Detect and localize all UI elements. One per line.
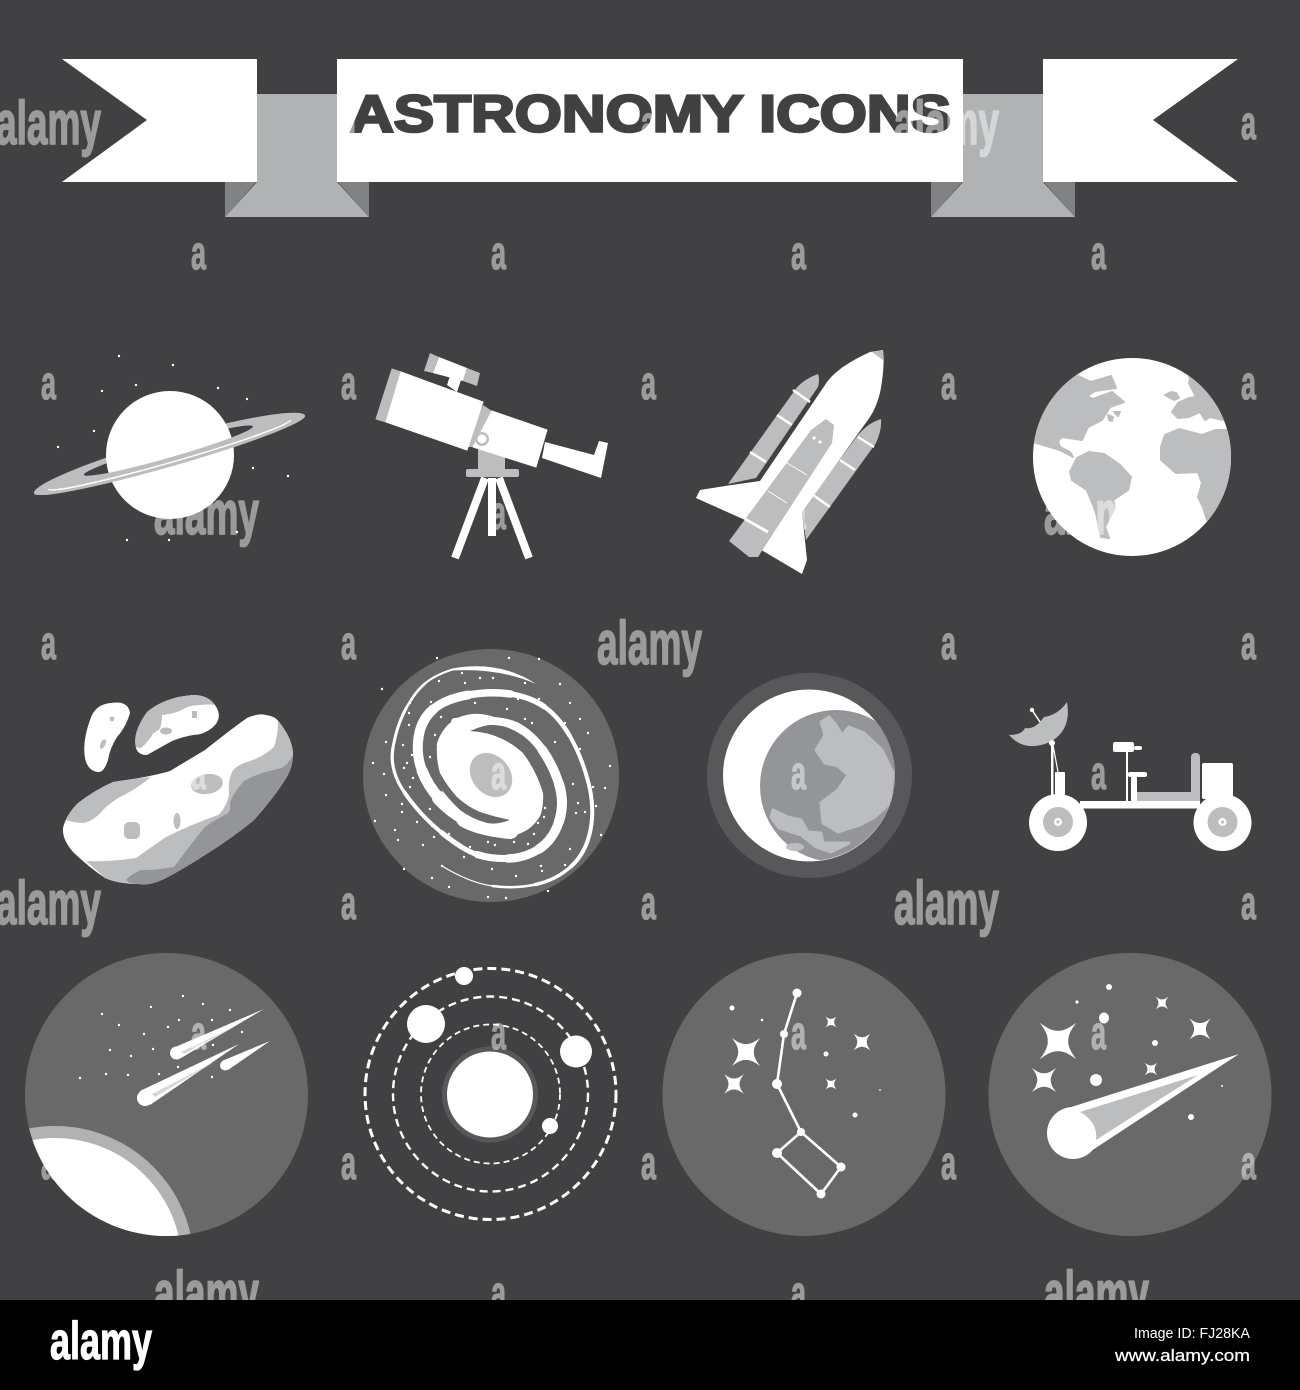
title ribbon: [62, 59, 1238, 217]
watermark pattern: alamy: [0, 869, 101, 937]
icon: solar system: [365, 967, 616, 1220]
icon: telescope: [376, 353, 608, 558]
icon: crescent moon: [707, 673, 912, 878]
watermark pattern: a: [641, 356, 656, 409]
watermark pattern: a: [341, 356, 356, 409]
watermark pattern: a: [1241, 1136, 1256, 1189]
watermark pattern: a: [41, 1136, 56, 1189]
watermark pattern: alamy: [154, 1259, 259, 1327]
watermark pattern: a: [791, 486, 806, 539]
watermark pattern: a: [491, 226, 506, 279]
watermark pattern: a: [191, 1006, 206, 1059]
watermark pattern: a: [791, 1266, 806, 1319]
watermark pattern: alamy: [0, 89, 101, 157]
website: www.alamy.com: [1114, 1346, 1250, 1365]
watermark pattern: a: [491, 746, 506, 799]
watermark pattern: a: [491, 1006, 506, 1059]
watermark pattern: a: [641, 1136, 656, 1189]
icon: big dipper constellation: [662, 953, 946, 1236]
watermark pattern: a: [491, 486, 506, 539]
icon: comet: [988, 953, 1272, 1236]
watermark pattern: a: [191, 746, 206, 799]
icon: saturn: [30, 355, 308, 541]
spiral arm one: [418, 693, 592, 887]
spiral arm two: [392, 670, 562, 859]
watermark pattern: a: [791, 1006, 806, 1059]
watermark pattern: alamy: [1044, 1259, 1149, 1327]
watermark pattern: a: [641, 96, 656, 149]
icon: earth globe: [1020, 358, 1240, 556]
watermark pattern: alamy: [894, 869, 999, 937]
image id: Image ID: FJ28KA: [1134, 1325, 1250, 1342]
watermark pattern: a: [1241, 876, 1256, 929]
footer logo: alamy: [50, 1312, 152, 1371]
icon: lunar rover: [1009, 702, 1252, 851]
watermark pattern: a: [941, 1136, 956, 1189]
watermark pattern: a: [1241, 356, 1256, 409]
watermark pattern: a: [941, 616, 956, 669]
icon: spiral galaxy: [363, 649, 619, 902]
watermark pattern: a: [1091, 746, 1106, 799]
watermark pattern: a: [1091, 226, 1106, 279]
watermark pattern: a: [1241, 616, 1256, 669]
watermark pattern: alamy: [154, 479, 259, 547]
watermark pattern: a: [791, 746, 806, 799]
watermark pattern: alamy: [1044, 479, 1149, 547]
watermark pattern: a: [341, 616, 356, 669]
watermark pattern: a: [341, 1136, 356, 1189]
watermark pattern: a: [1241, 96, 1256, 149]
watermark pattern: a: [641, 876, 656, 929]
watermark pattern: alamy: [894, 89, 999, 157]
watermark pattern: a: [491, 1266, 506, 1319]
watermark pattern: a: [341, 96, 356, 149]
watermark pattern: a: [41, 356, 56, 409]
icon: asteroids: [63, 695, 293, 884]
watermark pattern: a: [191, 226, 206, 279]
watermark pattern: alamy: [597, 609, 702, 677]
galaxy core: [412, 692, 569, 858]
watermark pattern: a: [1091, 1006, 1106, 1059]
watermark pattern: a: [941, 356, 956, 409]
watermark pattern: a: [41, 616, 56, 669]
icon: space shuttle: [696, 350, 884, 574]
icon: meteors over planet: [25, 953, 308, 1236]
title text: ASTRONOMY ICONS: [350, 86, 951, 144]
watermark pattern: a: [341, 876, 356, 929]
watermark pattern: a: [791, 226, 806, 279]
footer bar: [0, 1300, 1300, 1390]
